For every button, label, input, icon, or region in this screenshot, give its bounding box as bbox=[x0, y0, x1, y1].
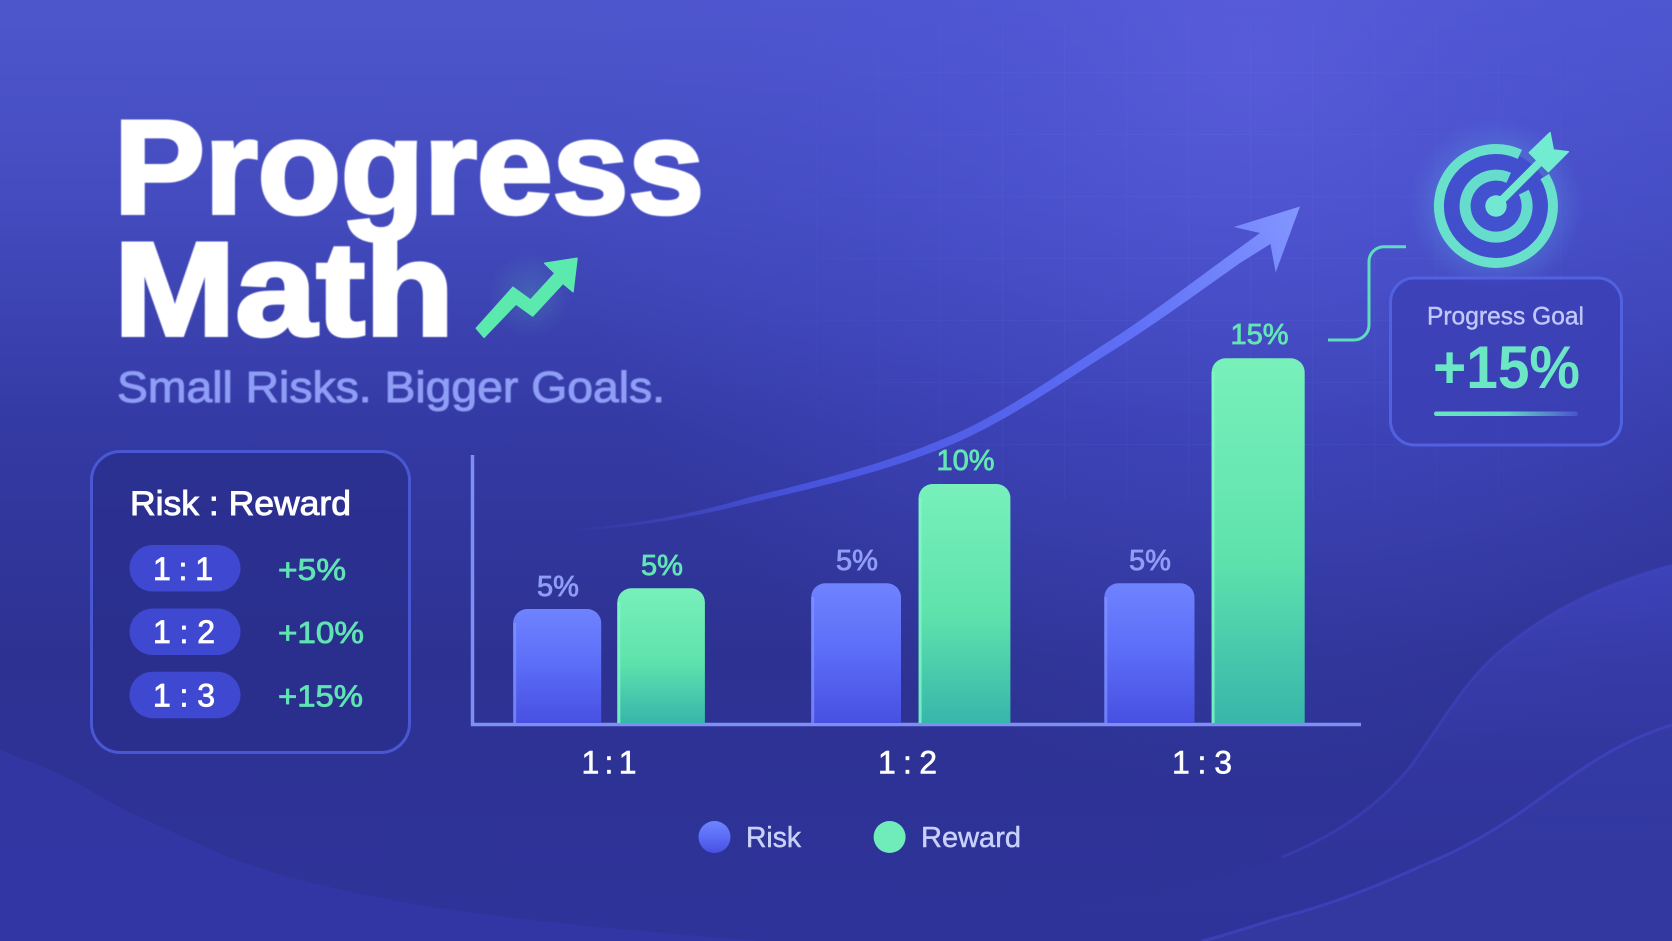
row 1:2 bbox=[130, 608, 364, 655]
title bbox=[114, 94, 704, 364]
bars 1:1 bbox=[513, 550, 705, 723]
bars 1:1: 5% bbox=[537, 571, 579, 603]
bars 1:2 bbox=[811, 445, 1010, 723]
bars 1:3: 15% bbox=[1230, 319, 1289, 351]
legend: Reward bbox=[921, 822, 1021, 854]
row 1:2: +10% bbox=[278, 615, 364, 650]
bars 1:2: 5% bbox=[836, 545, 878, 577]
category labels bbox=[582, 744, 1232, 780]
bar chart bbox=[472, 319, 1361, 780]
connector line bbox=[1328, 247, 1406, 340]
goal label: Progress Goal bbox=[1427, 302, 1584, 330]
goal value: +15% bbox=[1433, 334, 1580, 401]
panel heading: Risk : Reward bbox=[130, 485, 351, 523]
row 1:1: +5% bbox=[278, 552, 346, 587]
chart axes bbox=[472, 455, 1361, 724]
bars 1:3: 5% bbox=[1129, 545, 1171, 577]
subtitle: Small Risks. Bigger Goals. bbox=[117, 363, 665, 412]
category labels: 1 : 1 bbox=[582, 744, 636, 780]
bars 1:3 bbox=[1104, 319, 1305, 723]
legend bbox=[698, 821, 1021, 854]
row 1:1 bbox=[130, 545, 346, 592]
icon: green trend arrow bbox=[476, 253, 577, 337]
bars 1:1: 5% bbox=[641, 550, 683, 582]
row 1:1: 1 : 1 bbox=[153, 551, 213, 587]
panel: risk reward table bbox=[92, 452, 410, 752]
row 1:3 bbox=[130, 672, 363, 718]
title: Math bbox=[114, 216, 454, 364]
category labels: 1 : 2 bbox=[878, 744, 937, 780]
title: Progress bbox=[114, 94, 704, 242]
row 1:3: 1 : 3 bbox=[153, 678, 215, 714]
legend: Risk bbox=[746, 822, 801, 854]
row 1:3: +15% bbox=[278, 678, 363, 714]
category labels: 1 : 3 bbox=[1172, 744, 1232, 780]
row 1:2: 1 : 2 bbox=[153, 614, 215, 650]
bars 1:2: 10% bbox=[936, 445, 995, 477]
arrow: rising growth curve bbox=[560, 206, 1300, 531]
icon: target with arrow bbox=[1408, 118, 1584, 294]
goal progress bar bbox=[1434, 412, 1578, 416]
panel: progress goal bbox=[1390, 278, 1622, 445]
